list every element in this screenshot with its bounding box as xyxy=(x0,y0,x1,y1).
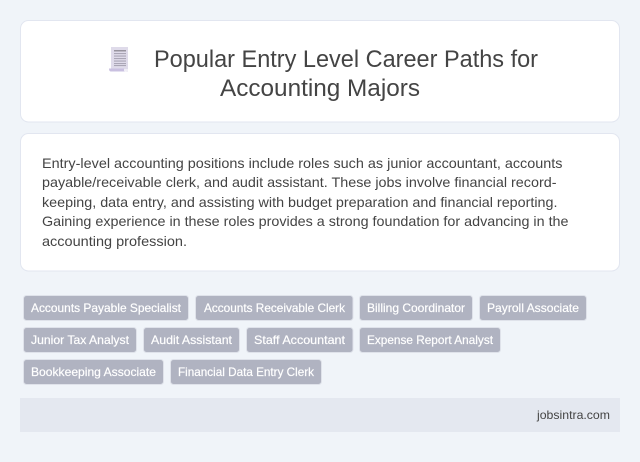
tag: Bookkeeping Associate xyxy=(31,365,156,379)
heading: Accounting Majors xyxy=(220,75,420,102)
description text: Gaining experience in these roles provides a strong foundation for advancing in the xyxy=(42,213,569,229)
description text: Entry-level accounting positions include roles such as junior accountant, accounts xyxy=(42,155,562,171)
tag: Junior Tax Analyst xyxy=(31,333,130,347)
tag xyxy=(360,328,500,352)
tag list: career paths xyxy=(24,296,586,384)
tag: Expense Report Analyst xyxy=(367,333,494,347)
tag: Billing Coordinator xyxy=(367,301,465,315)
tag xyxy=(170,360,322,384)
panel: description xyxy=(20,134,620,271)
footer source text: jobsintra.com xyxy=(536,408,610,422)
footer bar xyxy=(20,398,620,432)
tag: Accounts Payable Specialist xyxy=(31,301,182,315)
tag xyxy=(360,296,472,320)
panel: title header xyxy=(20,20,620,122)
tag xyxy=(24,328,136,352)
description text: payable/receivable clerk, and audit assistant. These jobs involve financial record- xyxy=(42,174,557,190)
heading: Popular Entry Level Career Paths for xyxy=(154,46,538,73)
tag xyxy=(144,328,240,352)
tag xyxy=(24,360,164,384)
tag xyxy=(246,328,353,352)
tag: Audit Assistant xyxy=(151,333,233,347)
tag: Financial Data Entry Clerk xyxy=(178,365,315,379)
tag: Staff Accountant xyxy=(254,333,346,347)
tag: Payroll Associate xyxy=(487,301,579,315)
tag: Accounts Receivable Clerk xyxy=(204,301,346,315)
tag xyxy=(480,296,586,320)
tag xyxy=(196,296,353,320)
icon: accounting ledger receipt xyxy=(109,47,128,72)
tag xyxy=(24,296,188,320)
description text: accounting profession. xyxy=(42,233,187,249)
description text: keeping, data entry, and assisting with budget preparation and financial reporting. xyxy=(42,194,558,210)
